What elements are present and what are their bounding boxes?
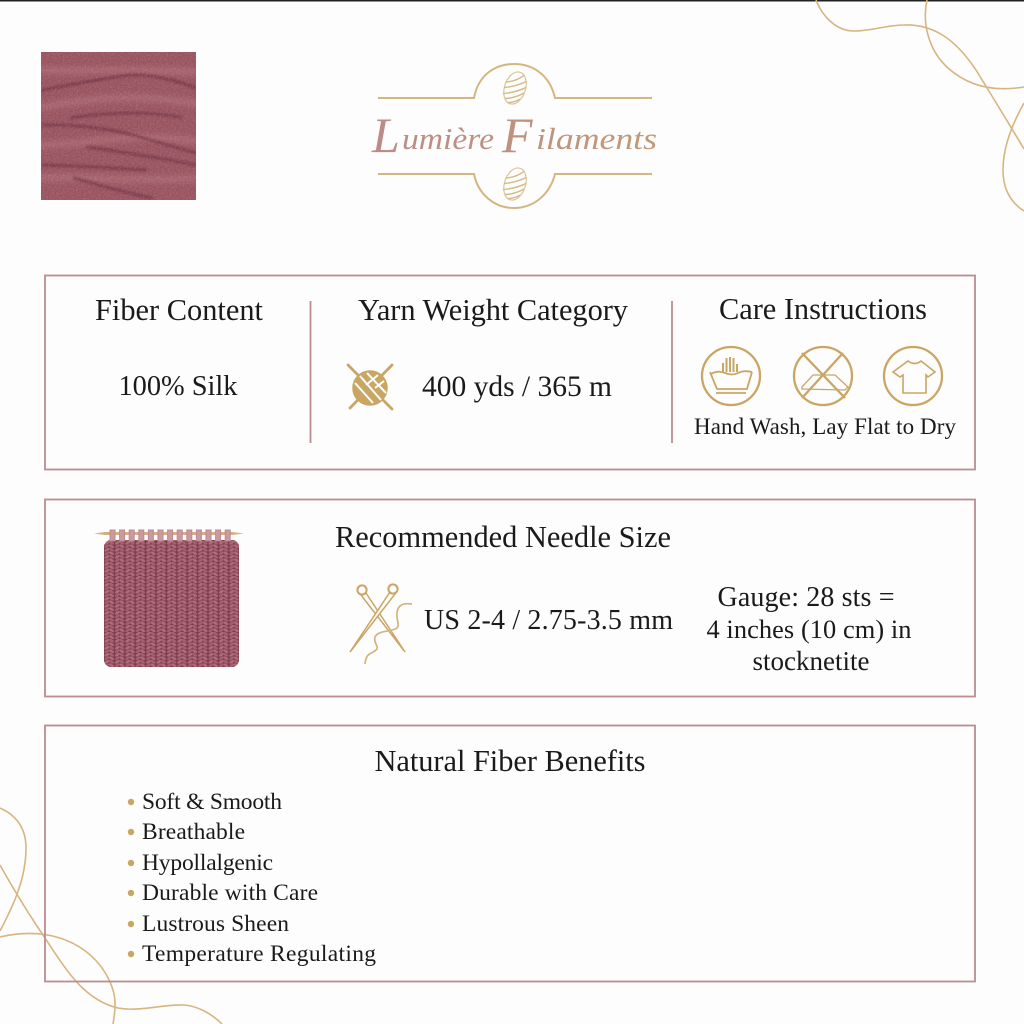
panel: needle size and gauge	[45, 500, 975, 696]
logo wordmark: L	[371, 107, 400, 163]
text: needle size: US 2-4 / 2.75-3.5 mm	[424, 605, 673, 636]
icon: yarn ball with needles	[348, 365, 392, 409]
logo: Lumière Filaments	[371, 64, 657, 208]
fabric swatch image	[36, 52, 200, 200]
logo wordmark	[371, 107, 657, 163]
text: gauge: 4 inches (10 cm) in	[706, 614, 912, 644]
logo frame top	[378, 64, 652, 98]
heading: care instructions: Care Instructions	[719, 292, 927, 326]
heading: fiber content: Fiber Content	[95, 293, 264, 327]
logo frame bottom	[378, 174, 652, 208]
text: gauge	[706, 582, 912, 676]
logo wordmark: ilaments	[536, 121, 657, 156]
icon: bottom cocoon	[500, 165, 530, 203]
logo wordmark: umière	[402, 121, 494, 156]
benefit: temperature regulating: Temperature Regulating	[142, 941, 376, 967]
benefit list	[128, 789, 376, 967]
heading: recommended needle size: Recommended Needle Size	[335, 520, 671, 554]
icon: crossed knitting needles	[350, 584, 412, 664]
heading: natural fiber benefits: Natural Fiber Benefits	[374, 744, 646, 778]
icon: lay flat, crossed	[794, 347, 852, 405]
text: yardage: 400 yds / 365 m	[422, 371, 612, 403]
illustration: knitted swatch on needle	[94, 530, 244, 667]
icon: t-shirt	[884, 347, 942, 405]
heading: yarn weight category: Yarn Weight Category	[358, 293, 629, 327]
decorative curves: top right	[816, 0, 1024, 211]
text: 100% silk: 100% Silk	[118, 371, 238, 402]
text: gauge: Gauge: 28 sts =	[718, 582, 894, 613]
benefit: hypoallergenic: Hypollalgenic	[142, 850, 273, 876]
benefit: durable with care: Durable with Care	[142, 880, 318, 906]
panel: natural fiber benefits	[45, 726, 975, 982]
icon: hand wash	[702, 347, 760, 405]
logo wordmark: F	[501, 107, 533, 163]
icon: top cocoon	[500, 69, 530, 107]
panel: yarn specifications	[45, 276, 975, 470]
decorative curves: bottom left	[0, 808, 222, 1024]
benefit: breathable: Breathable	[142, 819, 245, 845]
text: care summary: Hand Wash, Lay Flat to Dry	[694, 414, 956, 439]
benefit: soft and smooth: Soft & Smooth	[142, 789, 282, 815]
text: gauge: stocknetite	[752, 646, 870, 676]
benefit: lustrous sheen: Lustrous Sheen	[142, 911, 289, 937]
